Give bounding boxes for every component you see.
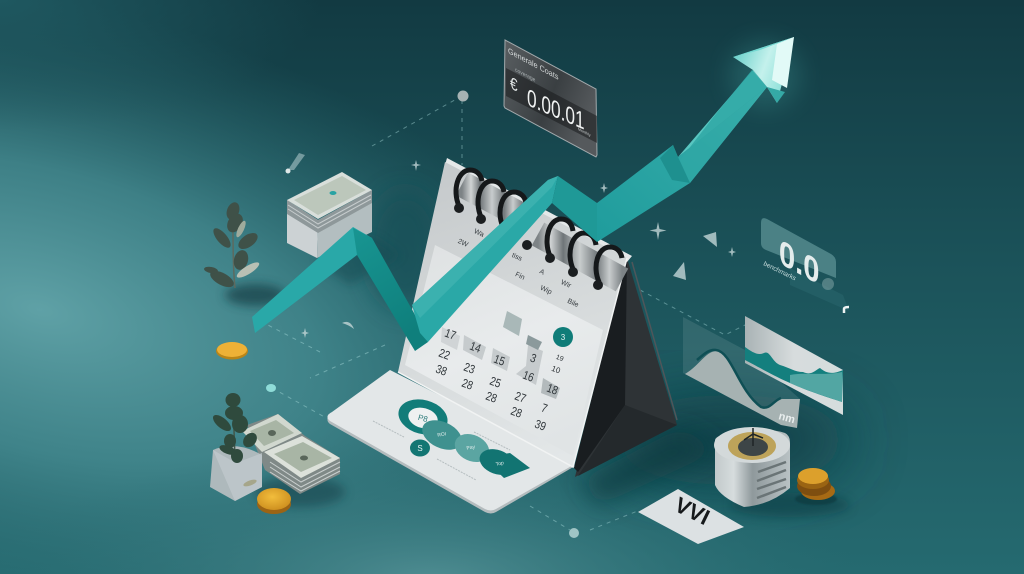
- infographic strip on base: P8: [417, 413, 429, 424]
- infographic strip on base: Top: [495, 460, 505, 468]
- date numbers: 23: [462, 361, 477, 377]
- date numbers: 39: [533, 418, 548, 434]
- date numbers: 28: [509, 405, 524, 421]
- card: general costs: Monthly: [578, 126, 591, 138]
- note card with logo: [638, 489, 744, 544]
- header weekday labels: Wa: [473, 228, 485, 239]
- date numbers: 25: [488, 375, 503, 391]
- plant in white pot: [210, 393, 262, 501]
- card: general costs: [504, 40, 597, 157]
- calendar front page: [398, 162, 627, 467]
- money stack: lower left: [242, 414, 345, 507]
- calendar back page edge: [445, 158, 632, 262]
- icon: gold coin: [216, 342, 248, 360]
- highlighted date cells: [441, 311, 560, 399]
- header weekday labels: A: [538, 268, 546, 277]
- calendar base sheet: [327, 370, 575, 514]
- icon: gold coin front: [257, 488, 291, 514]
- spiral binding: left rings: [454, 170, 532, 250]
- infographic strip on base: [373, 394, 530, 480]
- card: general costs: €: [510, 73, 518, 96]
- date numbers: 10: [550, 364, 562, 376]
- date numbers: 3: [528, 352, 538, 366]
- date numbers: 27: [513, 390, 528, 406]
- infographic strip on base: Pay: [466, 444, 476, 452]
- date numbers: 17: [443, 327, 458, 343]
- header weekday labels: [457, 228, 580, 309]
- arrow glow: [729, 41, 801, 109]
- connector node: bottom ring: [569, 528, 579, 538]
- card: metric 0.0: [761, 218, 849, 313]
- card: metric 0.0: 0.0: [779, 232, 819, 293]
- first rising segment: [252, 227, 372, 333]
- panel: right mountain chart: [745, 316, 843, 415]
- spiral binding: right rings: [538, 219, 622, 290]
- card: general costs: 0.00.01: [527, 83, 585, 135]
- date numbers: 28: [460, 377, 475, 393]
- date numbers: 7: [539, 402, 549, 416]
- header weekday labels: tiss: [511, 252, 523, 263]
- drum with seedling and text: [714, 427, 850, 517]
- money stack: upper left: [287, 172, 400, 285]
- panel: left area chart: nm: [777, 410, 796, 426]
- icon: coin stack right: [795, 468, 837, 505]
- header weekday labels: Bile: [566, 298, 580, 309]
- header weekday labels: Fin: [514, 271, 526, 282]
- dashed connector lines: [262, 96, 745, 530]
- descending segment: [353, 228, 428, 351]
- second rising segment: [412, 176, 558, 342]
- calendar back support: [574, 258, 677, 477]
- infographic strip on base: ROI: [437, 431, 447, 439]
- arrow head: [733, 37, 794, 103]
- calendar shadow: [580, 428, 720, 505]
- date numbers: 38: [434, 363, 449, 379]
- sparkles and floating triangles: [301, 160, 736, 338]
- icon: glass shard: [286, 153, 305, 174]
- date numbers: 19: [555, 354, 564, 363]
- date numbers: [434, 327, 564, 434]
- note card with logo: VVI: [671, 492, 714, 530]
- header weekday labels: Wir: [560, 279, 573, 290]
- date grid panel: [405, 245, 603, 456]
- current date marker: [553, 327, 573, 347]
- calendar: [327, 158, 720, 514]
- header weekday labels: Wip: [539, 285, 553, 296]
- header weekday labels: 2W: [457, 238, 469, 249]
- date numbers: 22: [437, 347, 452, 363]
- plant: left sprig: [204, 200, 285, 306]
- growth arrow: [252, 37, 794, 351]
- panel: left area chart: [683, 317, 800, 428]
- date numbers: 18: [545, 382, 560, 398]
- card: general costs: Generale Coats: [508, 46, 558, 82]
- card: general costs: coverage: [515, 67, 535, 84]
- infographic strip on base: S: [417, 444, 423, 453]
- upper rising segment: [552, 176, 597, 242]
- date numbers: 28: [484, 390, 499, 406]
- connector node: teal dot: [266, 384, 276, 392]
- date numbers: 14: [468, 340, 483, 356]
- card: metric 0.0: benchmarks: [762, 261, 798, 283]
- date numbers: 15: [492, 353, 507, 369]
- calendar front page: 3: [561, 333, 566, 342]
- date numbers: 16: [521, 369, 536, 385]
- connector node: top sphere: [458, 90, 468, 102]
